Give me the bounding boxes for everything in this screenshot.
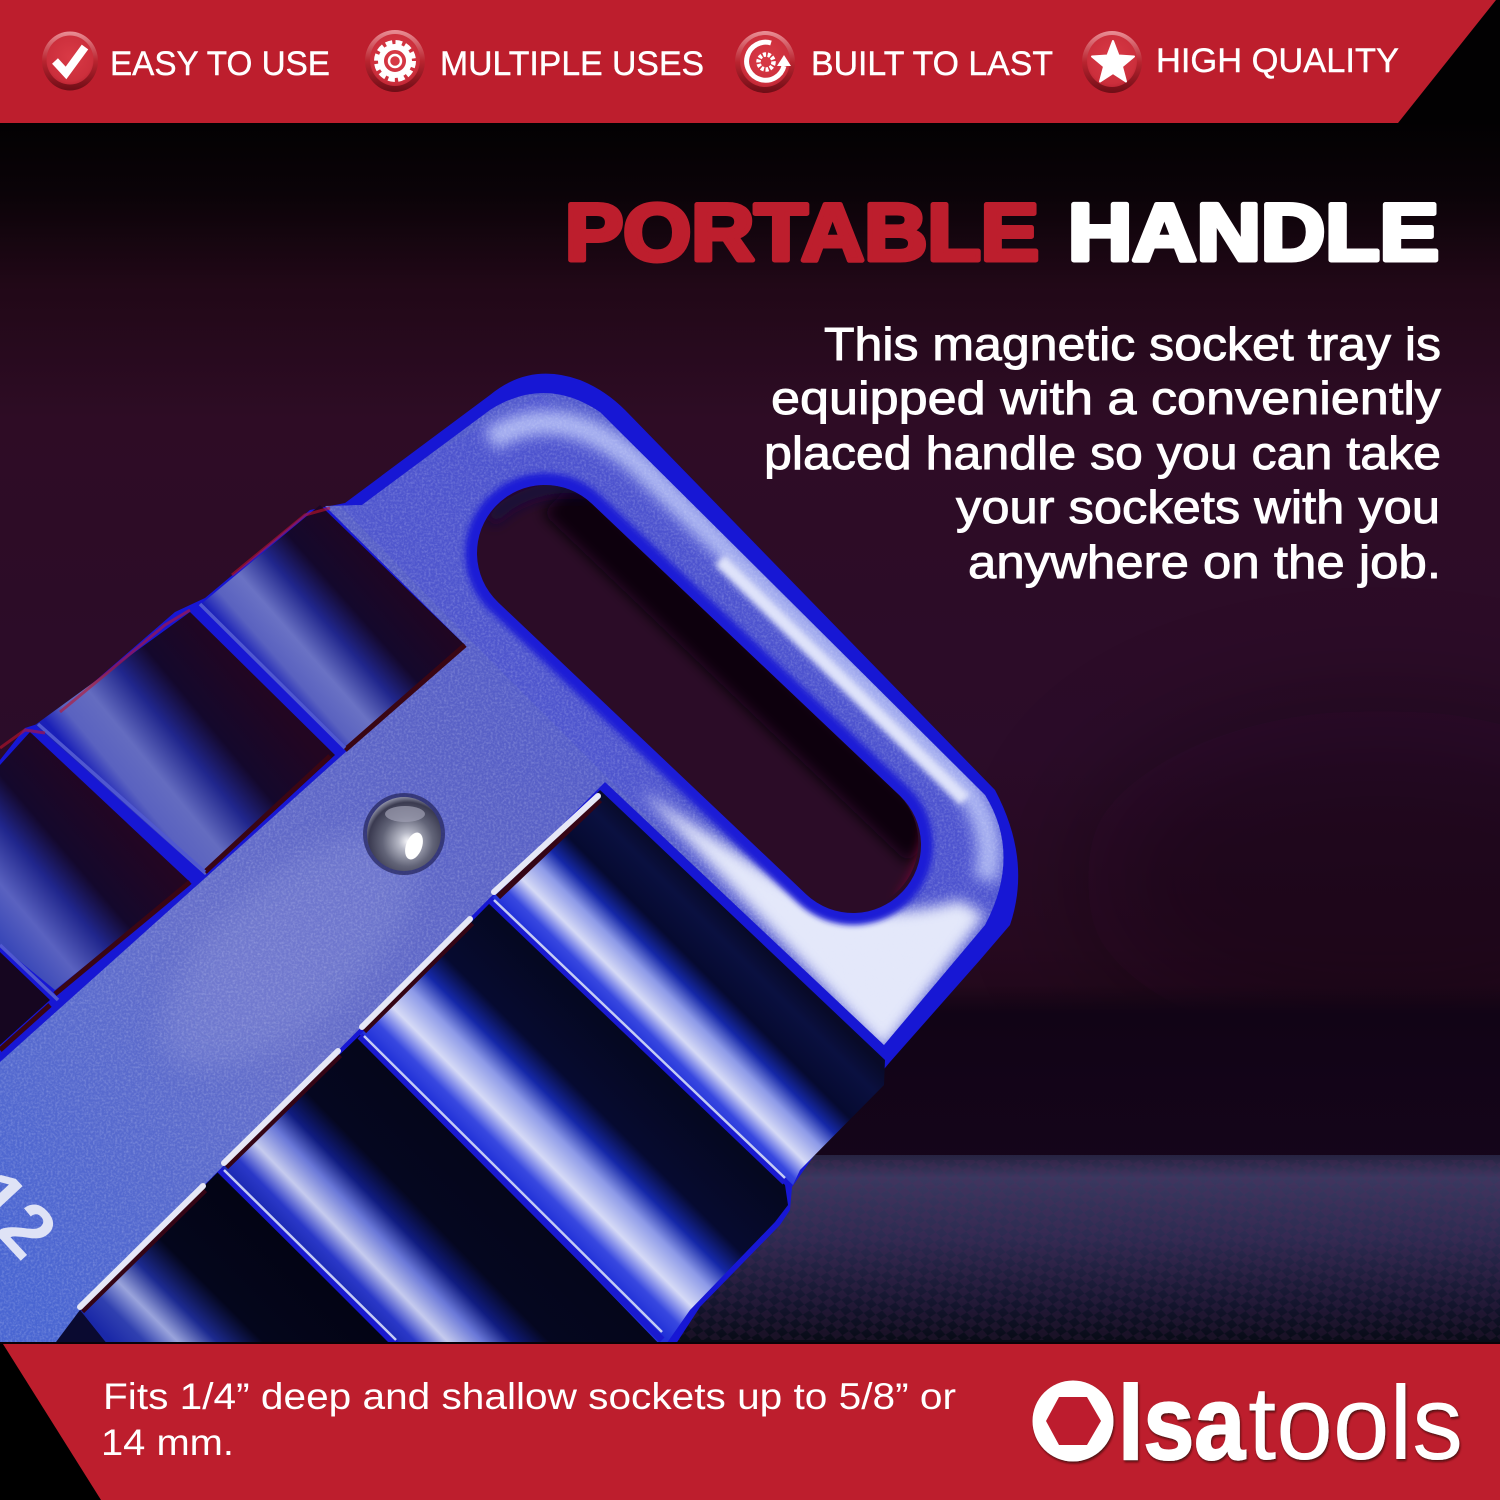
feature: multiple uses xyxy=(365,30,704,92)
upper left sockets xyxy=(0,505,465,1050)
description text block: equipped with a conveniently xyxy=(771,372,1441,424)
description text block xyxy=(764,318,1441,588)
top feature banner xyxy=(0,0,1496,123)
logo: Olsatools: O xyxy=(1034,1366,1112,1482)
plate and handle face xyxy=(0,393,1004,1342)
description text block: This magnetic socket tray is xyxy=(824,318,1441,370)
tray body silhouette xyxy=(0,374,1018,1350)
lower sockets xyxy=(50,790,885,1350)
handle opening xyxy=(490,488,934,905)
title: portable handle: PORTABLE xyxy=(565,188,1039,278)
logo: Olsatools xyxy=(1032,1365,1463,1482)
bottom banner xyxy=(0,1342,1500,1500)
feature: high quality: HIGH QUALITY xyxy=(1156,42,1399,80)
description text block: anywhere on the job. xyxy=(968,536,1441,588)
feature: easy to use xyxy=(42,32,330,90)
fitment note: 14 mm. xyxy=(101,1422,234,1463)
description text block: your sockets with you xyxy=(956,481,1440,533)
feature: easy to use: EASY TO USE xyxy=(110,45,330,83)
title: portable handle: HANDLE xyxy=(1068,188,1439,278)
photo: blue socket tray with handle xyxy=(0,374,1018,1342)
description text block: placed handle so you can take xyxy=(764,427,1441,479)
icon: check mark badge xyxy=(42,32,98,90)
feature: high quality xyxy=(1082,31,1399,93)
rivet xyxy=(363,793,445,875)
icon: rotating gear badge xyxy=(735,31,795,93)
icon: gear badge xyxy=(365,30,425,92)
logo: Olsatools: tools xyxy=(1248,1365,1463,1482)
feature: multiple uses: MULTIPLE USES xyxy=(440,45,704,83)
feature: built to last xyxy=(735,31,1053,93)
feature: built to last: BUILT TO LAST xyxy=(811,45,1053,83)
icon: star badge xyxy=(1082,31,1142,93)
title: portable handle xyxy=(565,188,1439,278)
fitment note: Fits 1/4” deep and shallow sockets up to 5/8” or xyxy=(103,1376,956,1417)
logo: Olsatools: lsa xyxy=(1118,1365,1246,1482)
fitment note xyxy=(101,1376,956,1463)
white slots along plate edge xyxy=(80,796,600,1311)
